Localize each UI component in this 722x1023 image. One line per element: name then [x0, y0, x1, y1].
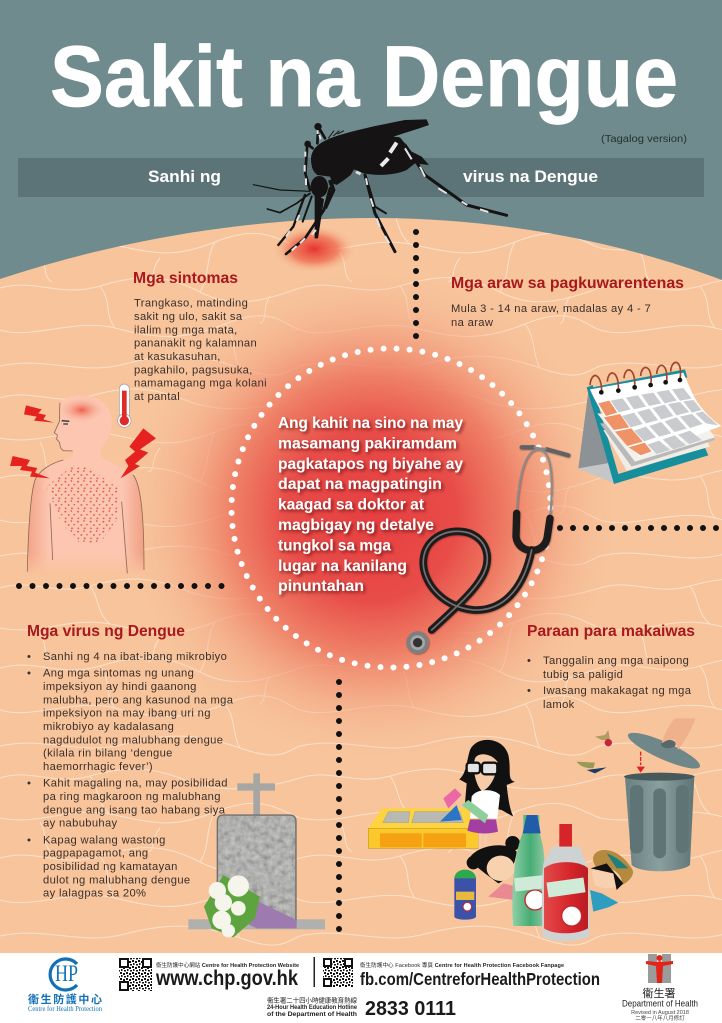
icon: thermometer [118, 384, 131, 427]
subtitle: Sanhi ng [148, 168, 221, 186]
band: subtitle strip [18, 158, 704, 197]
hotline: 衞生署二十四小時健康教育熱線 [267, 996, 358, 1004]
callout: central message [278, 415, 463, 595]
text: dengue virus bullets: impeksiyon na may ibang uri ng [43, 708, 211, 720]
dotted line: right horizontal [560, 525, 718, 531]
text: dengue virus bullets: • [27, 778, 31, 790]
icon: stethoscope [406, 447, 568, 654]
text: dengue virus bullets: • [27, 651, 31, 663]
icon: calendar [578, 362, 721, 484]
footer [0, 953, 722, 1023]
callout: central message: masamang pakiramdam [278, 435, 457, 452]
Facebook link: fb.com/CentreforHealthProtection [360, 969, 600, 989]
icon: man with symptoms [10, 384, 156, 575]
panel: prevention [527, 623, 695, 711]
QR code: website [119, 958, 152, 991]
woman [443, 740, 515, 848]
website link: 衞生防護中心網站 Centre for Health Protection Website [156, 961, 299, 969]
icon: gravestone [188, 773, 325, 937]
background: skin dome [0, 218, 722, 955]
callout: central message: kaagad sa doktor at [278, 497, 425, 514]
logo: Centre for Health Protection: HP [55, 961, 78, 986]
hotline [267, 996, 456, 1020]
text: dengue virus bullets: posibilidad ng kamatayan [43, 861, 178, 873]
text: dengue virus bullets: (kilala rin bilang ‘dengue [43, 748, 173, 760]
text: quarantine: Mula 3 - 14 na araw, madalas ay 4 - 7 [451, 303, 651, 315]
logo: Department of Health: Revised in August 2018 [631, 1010, 689, 1016]
mosquitoes [577, 730, 612, 773]
text: prevention bullets: lamok [543, 699, 575, 711]
panel: dengue viruses [27, 623, 237, 900]
divider [314, 957, 315, 987]
text: dengue virus bullets: Kapag walang wastong [43, 834, 166, 846]
heading: dengue viruses: Mga virus ng Dengue [27, 623, 185, 640]
text: dengue virus bullets: dulot ng malubhang dengue [43, 874, 190, 886]
text: prevention bullets: tubig sa paligid [543, 669, 623, 681]
Facebook link [360, 961, 600, 989]
text: dengue virus bullets: pa ring magkaroon ng malubhang [43, 791, 221, 803]
text: symptoms: at kasukasuhan, [134, 351, 221, 363]
trash bin [624, 718, 703, 871]
title: Sakit na Dengue [50, 29, 678, 125]
hotline: of the Department of Health [267, 1012, 357, 1018]
text: dengue virus bullets: nagdudulot ng malubhang dengue [43, 734, 223, 746]
subtitle continued: virus na Dengue [463, 168, 598, 186]
hotline: 2833 0111 [365, 998, 456, 1020]
callout: central message: pagkatapos ng biyahe ay [278, 456, 463, 473]
website link: www.chp.gov.hk [155, 967, 298, 990]
dotted line: left horizontal [19, 583, 224, 589]
text: symptoms: namamagang mga kolani [134, 378, 267, 390]
logo: Department of Health: 二零一八年八月修訂 [635, 1014, 685, 1022]
text: dengue virus bullets: pagpapagamot, ang [43, 848, 148, 860]
red centre glow [122, 265, 622, 765]
logo: Department of Health: 衞生署 [642, 986, 676, 1000]
text: prevention bullets: Tanggalin ang mga naipong [543, 655, 689, 667]
text: dengue virus bullets: malubha, pero ang kasunod na mga [43, 694, 234, 706]
background: teal header [0, 0, 722, 300]
text: dengue virus bullets: mikrobiyo ay kadalasang [43, 721, 174, 733]
logo: Centre for Health Protection: Centre for Health Protection [28, 1005, 102, 1013]
text: prevention bullets: Iwasang makakagat ng mga [543, 685, 692, 697]
panel: symptoms [133, 270, 270, 403]
callout: central message: dapat na magpatingin [278, 476, 442, 493]
text: symptoms: sakit ng ulo, sakit sa [134, 311, 243, 323]
Facebook link: 衞生防護中心 Facebook 專頁 Centre for Health Protection Facebook Fanpage [360, 961, 564, 969]
heading: quarantine: Mga araw sa pagkuwarentenas [451, 275, 684, 292]
QR code: Facebook [323, 958, 353, 987]
language note: (Tagalog version) [601, 133, 687, 145]
hotline: 24-Hour Health Education Hotline [267, 1005, 358, 1011]
text: quarantine: na araw [451, 317, 494, 329]
heading: prevention: Paraan para makaiwas [527, 623, 695, 640]
text: prevention bullets: • [527, 655, 531, 667]
icon: cleaning and repellent scene [368, 718, 703, 941]
dotted circle [232, 348, 550, 668]
text: dengue virus bullets: Sanhi ng 4 na ibat-ibang mikrobiyo [43, 651, 227, 663]
text: symptoms: Trangkaso, matinding [134, 298, 248, 310]
text: dengue virus bullets: dengue ang isang tao habang siya [43, 804, 226, 816]
text: dengue virus bullets: Kahit magaling na, may posibilidad [43, 778, 228, 790]
text: dengue virus bullets: ay lalagpas sa 20% [43, 888, 146, 900]
icon: mosquito [253, 119, 507, 254]
sink [368, 805, 478, 848]
heading: symptoms: Mga sintomas [133, 270, 238, 287]
logo: Department of Health: Department of Health [622, 999, 698, 1010]
text: dengue virus bullets: ay nabubuhay [43, 818, 118, 830]
logo: Centre for Health Protection: 衞生防護中心 [28, 992, 102, 1006]
callout: central message: magbigay ng detalye [278, 517, 434, 534]
dotted line: top vertical [413, 229, 419, 339]
text: dengue virus bullets: haemorrhagic fever’) [43, 761, 153, 773]
text: symptoms: ilalim ng mga mata, [134, 324, 238, 336]
text: symptoms: at pantal [134, 391, 180, 403]
logo: Department of Health [622, 954, 698, 1022]
text: symptoms: pananakit ng kalamnan [134, 338, 257, 350]
callout: central message: Ang kahit na sino na may [278, 415, 463, 432]
text: dengue virus bullets: impeksiyon ay hindi gaanong [43, 681, 197, 693]
bite mark [272, 225, 356, 273]
callout: central message: tungkol sa mga [278, 537, 391, 554]
text: dengue virus bullets: • [27, 668, 31, 680]
text: dengue virus bullets: • [27, 834, 31, 846]
text: prevention bullets: • [527, 685, 531, 697]
logo: Centre for Health Protection [28, 959, 102, 1013]
callout: central message: pinuntahan [278, 578, 364, 595]
dotted line: bottom vertical [336, 682, 342, 938]
text: dengue virus bullets: Ang mga sintomas ng unang [43, 668, 194, 680]
text: symptoms: pagkahilo, pagsusuka, [134, 364, 253, 376]
panel: quarantine [451, 275, 684, 329]
callout: central message: lugar na kanilang [278, 558, 407, 575]
children and bottles [454, 815, 633, 941]
